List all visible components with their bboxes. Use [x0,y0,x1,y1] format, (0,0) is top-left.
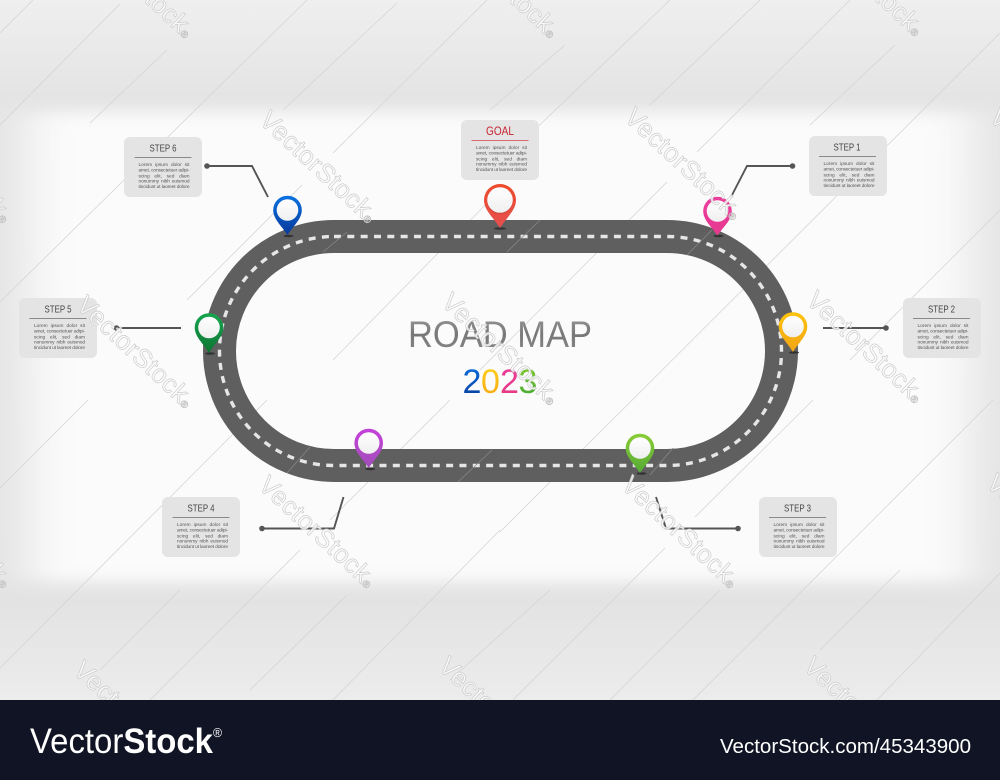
road [220,220,782,482]
text block: step 4: tincidunt ut laoreet dolore [177,544,228,550]
text block: step 1: tincidunt ut laoreet dolore [824,183,875,189]
text block: step 6: scing elit, sed diam [138,173,190,179]
text block: step 5: Lorem ipsum dolor sit [34,323,86,329]
panel: step 2 [903,298,981,358]
text block: step 4: Lorem ipsum dolor sit [177,522,229,528]
year: 2 [462,363,481,401]
panel: step 1 [809,136,887,196]
heading: step 6: STEP 6 [150,142,177,154]
watermarks: VectorStock® [71,289,202,414]
text block: step 4: amet, consectetuer adipi- [177,528,228,534]
watermarks: VectorStock® [801,284,932,409]
footer logo: ® [213,725,222,740]
text block: step 4: nonummy nibh euismod [177,539,228,545]
panel: step 5 [19,298,97,358]
text block: step 3: nonummy nibh euismod [774,539,825,545]
connector: step 3 [656,497,741,531]
panel: step 3 [759,497,837,557]
text block: step 6: tincidunt ut laoreet dolore [138,184,190,190]
text block: step 2 [918,323,969,351]
text block: step 6: Lorem ipsum dolor sit [138,162,190,168]
watermarks: VectorStock® [619,101,750,226]
footer bar [0,700,1000,780]
connector: step 6 [204,163,268,197]
text block: step 2: nonummy nibh euismod [918,340,969,346]
watermarks: VectorStock® [68,654,199,779]
icon: step 5 pin [195,313,223,355]
icon: step 1 pin [703,197,732,237]
connector: step 4 [259,497,344,531]
text block: step 5: scing elit, sed diam [34,334,85,340]
text block: goal [476,145,528,173]
panel: step 4 [162,497,240,557]
connector: step 5 [114,325,181,331]
text block: goal: Lorem ipsum dolor sit [476,145,528,151]
year: 0 [481,363,500,401]
heading: step 1: STEP 1 [834,142,861,154]
footer logo: VectorStock [30,722,219,761]
year [462,363,537,401]
text block: step 2: amet, consectetuer adipi- [918,329,969,335]
icon: step 3 pin [626,434,654,475]
footer id: VectorStock.com/45343900 [720,736,971,758]
text block: step 1: Lorem ipsum dolor sit [824,161,875,167]
text block: step 2: Lorem ipsum dolor sit [918,323,969,329]
text block: step 4: scing elit, sed diam [177,533,228,539]
text block: step 6: nonummy nibh euismod [138,179,190,185]
panel: step 6 [124,137,202,197]
text block: step 5: tincidunt ut laoreet dolore [34,345,85,351]
text block: step 3: amet, consectetuer adipi- [774,528,825,534]
text block: goal: tincidunt ut laoreet dolore [476,167,527,173]
text block: step 2: scing elit, sed diam [918,334,968,340]
text block: step 3: tincidunt ut laoreet dolore [774,544,825,550]
year: 2 [500,363,519,401]
text block: step 1: nonummy nibh euismod [824,178,875,184]
watermarks: VectorStock® [253,469,384,594]
icon: goal pin [484,184,516,230]
text block: step 3: Lorem ipsum dolor sit [774,522,825,528]
text block: step 2: tincidunt ut laoreet dolore [918,345,969,351]
connector: step 1 [731,163,795,197]
panel: goal [461,120,539,180]
connector: step 2 [823,325,889,331]
icon: step 6 pin [273,196,302,237]
text block: step 1 [824,161,875,189]
watermarks: VectorStock® [616,469,747,594]
text block: goal: amet, consectetuer adipi- [476,151,527,157]
text block: step 1: amet, consectetuer adipi- [824,167,875,173]
text block: step 1: scing elit, sed diam [824,172,874,178]
text block: step 5: nonummy nibh euismod [34,340,85,346]
text block: goal: nonummy nibh euismod [476,162,527,168]
heading: goal: GOAL [486,124,514,138]
text block: goal: scing elit, sed diam [476,156,527,162]
heading: step 3: STEP 3 [784,502,811,514]
watermarks: VectorStock® [798,650,929,775]
text block: step 6 [138,162,190,190]
icon: step 4 pin [354,429,383,470]
heading: step 2: STEP 2 [928,304,955,316]
text block: step 4 [177,522,229,550]
watermarks: VectorStock® [433,650,564,775]
text block: step 3: scing elit, sed diam [774,533,824,539]
watermarks: VectorStock® [436,286,567,411]
text block: step 5: amet, consectetuer adipi- [34,329,85,335]
watermarks: VectorStock® [254,104,385,229]
text block: step 5 [34,323,86,351]
icon: step 2 pin [779,312,807,354]
year: 3 [518,363,537,401]
text block: step 6: amet, consectetuer adipi- [138,168,190,174]
heading: step 5: STEP 5 [44,304,72,316]
text block: step 3 [774,522,825,550]
title: ROAD MAP [408,314,592,355]
heading: step 4: STEP 4 [188,502,215,514]
